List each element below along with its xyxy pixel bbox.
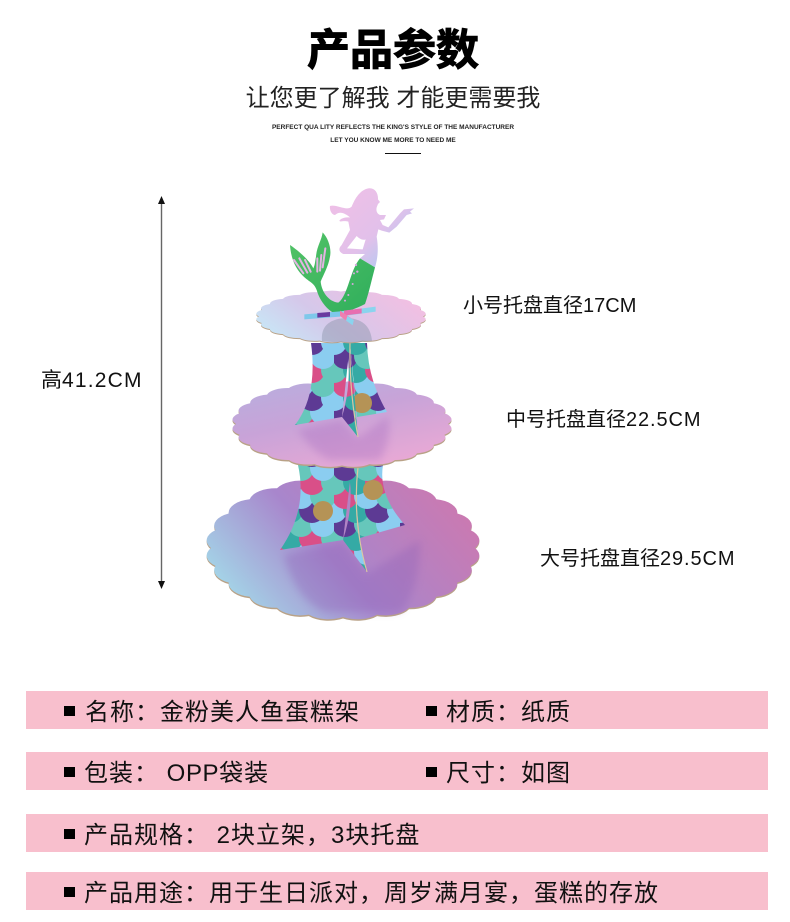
material: 材质：纸质 bbox=[446, 699, 571, 726]
product name: 名称：金粉美人鱼蛋糕架 bbox=[85, 699, 360, 726]
english tagline second line: LET YOU KNOW ME MORE TO NEED ME bbox=[330, 137, 456, 144]
mermaid topper bbox=[290, 188, 414, 325]
subtitle: 让您更了解我 才能更需要我 bbox=[246, 85, 540, 112]
bullet bbox=[64, 887, 75, 897]
large tray label: 大号托盘直径29.5CM bbox=[540, 548, 735, 570]
specification text: 产品规格： 2块立架，3块托盘 bbox=[84, 822, 420, 849]
short rule under header bbox=[385, 153, 421, 154]
tail fin stripes bbox=[294, 248, 325, 273]
bullet bbox=[426, 706, 437, 716]
lower stand bbox=[280, 465, 405, 572]
small tray bbox=[256, 291, 426, 343]
spec row: usage bbox=[26, 872, 768, 910]
medium tray label: 中号托盘直径22.5CM bbox=[506, 409, 701, 431]
cross base of topper bbox=[304, 307, 376, 325]
large tray bbox=[207, 477, 479, 621]
usage text: 产品用途：用于生日派对，周岁满月宴，蛋糕的存放 bbox=[84, 880, 659, 907]
bullet bbox=[426, 767, 437, 777]
spec row: specification bbox=[26, 814, 768, 852]
title: 产品参数 bbox=[307, 27, 479, 75]
upper stand bbox=[295, 343, 387, 437]
bullet bbox=[64, 706, 75, 716]
small tray label: 小号托盘直径17CM bbox=[463, 295, 636, 317]
middle tray bbox=[233, 381, 451, 468]
product illustration: mermaid cake stand with height arrow bbox=[158, 188, 480, 621]
english tagline: PERFECT QUA LITY REFLECTS THE KING'S STYLE OF THE MANUFACTURER bbox=[272, 124, 514, 131]
packaging: 包装： OPP袋装 bbox=[84, 760, 269, 787]
mermaid upper body bbox=[330, 188, 414, 267]
size: 尺寸：如图 bbox=[446, 760, 571, 787]
mermaid green tail bbox=[290, 232, 375, 315]
height arrow bbox=[158, 196, 165, 589]
bullet bbox=[64, 767, 75, 777]
tail dots bbox=[344, 264, 358, 302]
bullet bbox=[64, 829, 75, 839]
spec row: name and material bbox=[26, 691, 768, 729]
spec row: packaging and size bbox=[26, 752, 768, 790]
height label: 高41.2CM bbox=[41, 369, 143, 392]
